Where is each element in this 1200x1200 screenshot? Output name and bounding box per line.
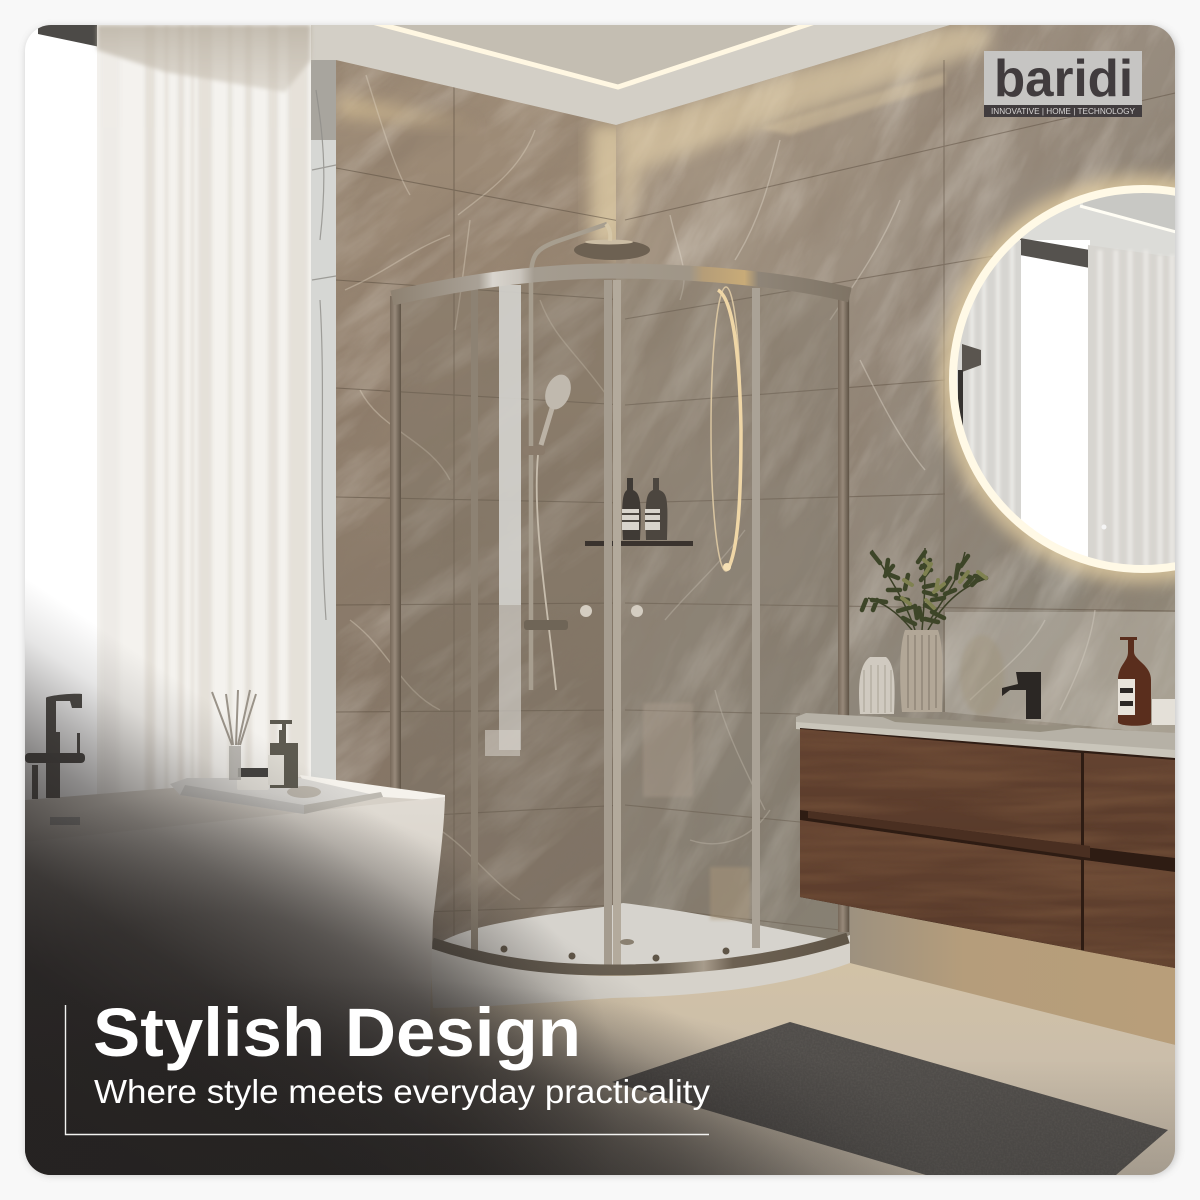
pale marble behind curtain [310,60,336,820]
small white box [1152,699,1175,725]
riser and arm [531,224,607,690]
plinth [430,935,850,1008]
tall ribbed vase [900,630,943,712]
lower left drawer [800,820,1081,950]
center door posts [604,280,612,966]
logo: baridi: baridi [994,50,1133,108]
wall below vanity, lit [850,906,1175,1045]
marble bath tray [170,778,383,814]
heading: Stylish Design [93,994,581,1071]
curved top rail [392,271,850,298]
jar [237,768,269,790]
upper left drawer [800,729,1081,845]
inner right door edge [752,288,760,948]
mirror curtains [1020,240,1021,520]
glass panels [392,271,850,968]
logo: baridi: INNOVATIVE | HOME | TECHNOLOGY [991,106,1135,116]
upper right drawer [1084,753,1175,858]
shower enclosure [390,224,850,1008]
vanity countertop [796,637,1175,759]
wood grain lower right [1084,860,1175,968]
bathtub [25,690,445,1175]
left post [390,296,401,789]
tub front [25,797,445,1175]
lower right drawer [1084,860,1175,968]
inner left door edge [471,288,478,953]
ceiling [300,22,960,125]
sheer curtains [97,25,311,825]
amber soap bottle [1118,637,1151,726]
round backlit mirror [939,175,1200,585]
bottom track [432,938,848,970]
dark gradient overlay [25,500,1175,1175]
wood vanity cabinet [800,728,1175,968]
floor tub faucet [25,694,85,799]
lower dark pool overlay [25,975,945,1175]
mirror shower arm reflection [962,344,981,372]
mirror window [1020,240,1090,585]
tub rim light [300,775,445,801]
drawer recess [808,811,1090,858]
mirror reflected ceiling [1020,203,1175,258]
bottom fade overlay [25,1060,1175,1175]
shower tray [443,903,827,964]
wood grain lower left [800,820,1081,950]
door knobs [580,605,592,617]
rain shower head [574,240,650,260]
curved light reflection [711,287,741,571]
wood grain upper left [800,729,1081,845]
reed diffuser [212,690,256,745]
wood grain upper right [1084,753,1175,858]
plant and vases [859,548,988,714]
glass bottle [270,720,298,788]
soap [287,786,321,798]
tub inner [25,777,445,842]
reflection strip on glass [499,285,521,605]
reflections in glass [643,703,693,797]
hand shower [541,405,553,445]
corner shelf with bottles [585,478,693,546]
window [25,25,97,800]
basin tap [1002,672,1041,719]
dark leaves [862,552,986,624]
lit leaves [902,560,986,608]
right post [838,292,849,932]
floor mat [612,1022,1168,1175]
mixer valve [524,620,568,630]
left marble wall [336,60,616,942]
right marble wall [616,25,1175,938]
tray roller feet [500,946,730,962]
short white vase [859,657,895,714]
subheading: Where style meets everyday practicality [94,1073,711,1110]
floor [430,963,1175,1175]
dark overlay over tub [25,790,625,1175]
caption frame lines [66,1005,709,1134]
plant stems [868,548,988,630]
